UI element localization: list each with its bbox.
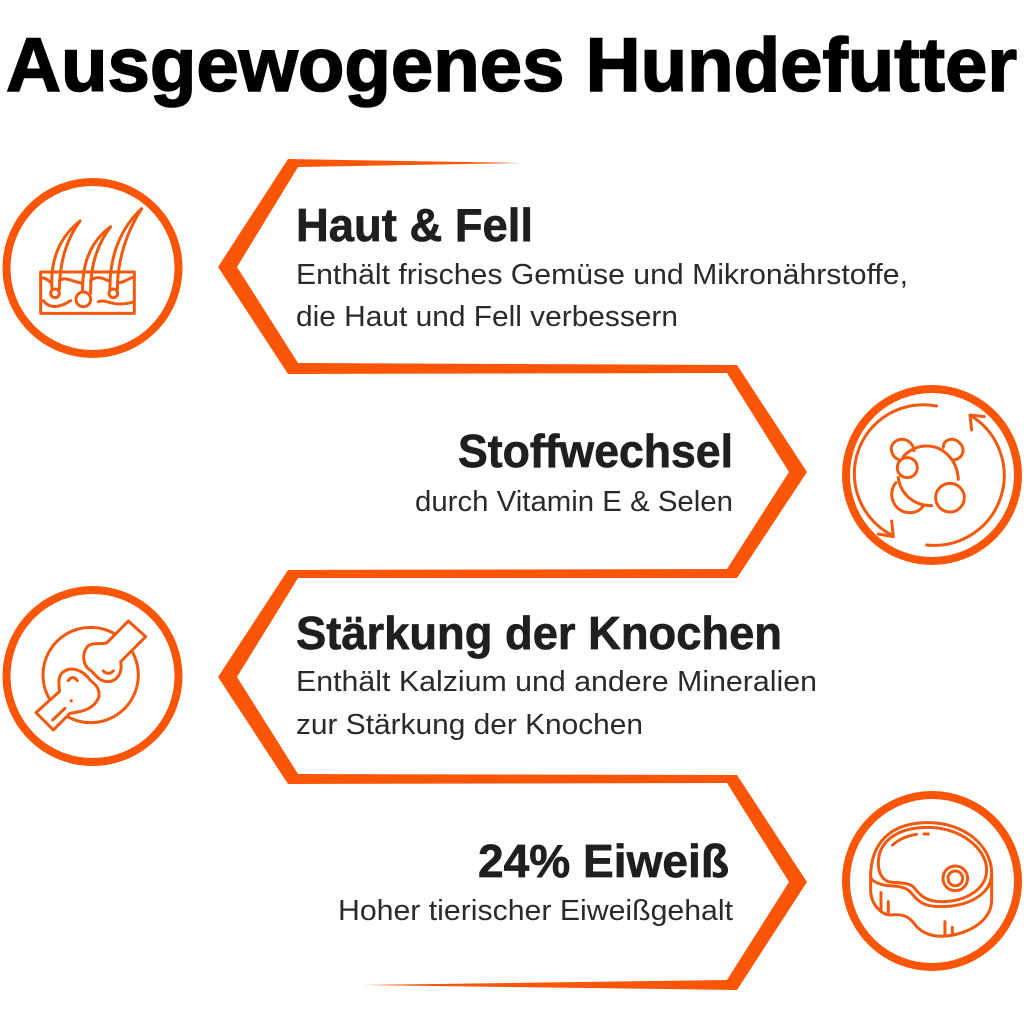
zigzag arrow frame (218, 159, 807, 990)
text: Knochen description (296, 666, 817, 741)
text: Stoffwechsel description: durch Vitamin E & Selen (415, 486, 733, 518)
icon: meat steak (846, 795, 1018, 967)
title: Ausgewogenes Hundefutter (6, 23, 1017, 108)
heading: Stoffwechsel: Stoffwechsel (458, 425, 733, 477)
panel: Knochen (296, 607, 817, 741)
text: Knochen description: zur Stärkung der Knochen (296, 709, 643, 741)
text: Haut und Fell description (296, 259, 908, 333)
text: Haut und Fell description: Enthält frisches Gemüse und Mikronährstoffe, (296, 259, 908, 291)
heading: Eiweiss: 24% Eiweiß (478, 835, 729, 887)
heading: Haut und Fell: Haut & Fell (296, 199, 533, 251)
icon: skin and hair (6, 182, 178, 354)
icon: bone joint (6, 590, 178, 762)
panel: Stoffwechsel (415, 425, 733, 518)
text: Haut und Fell description: die Haut und Fell verbessern (296, 301, 678, 333)
panel: Eiweiss (338, 835, 733, 927)
heading: Knochen: Stärkung der Knochen (296, 607, 782, 659)
text: Knochen description: Enthält Kalzium und andere Mineralien (296, 666, 817, 698)
text: Eiweiss description: Hoher tierischer Eiweißgehalt (338, 895, 733, 927)
panel: Haut und Fell (296, 199, 908, 333)
icon: metabolism cycle (846, 389, 1018, 561)
